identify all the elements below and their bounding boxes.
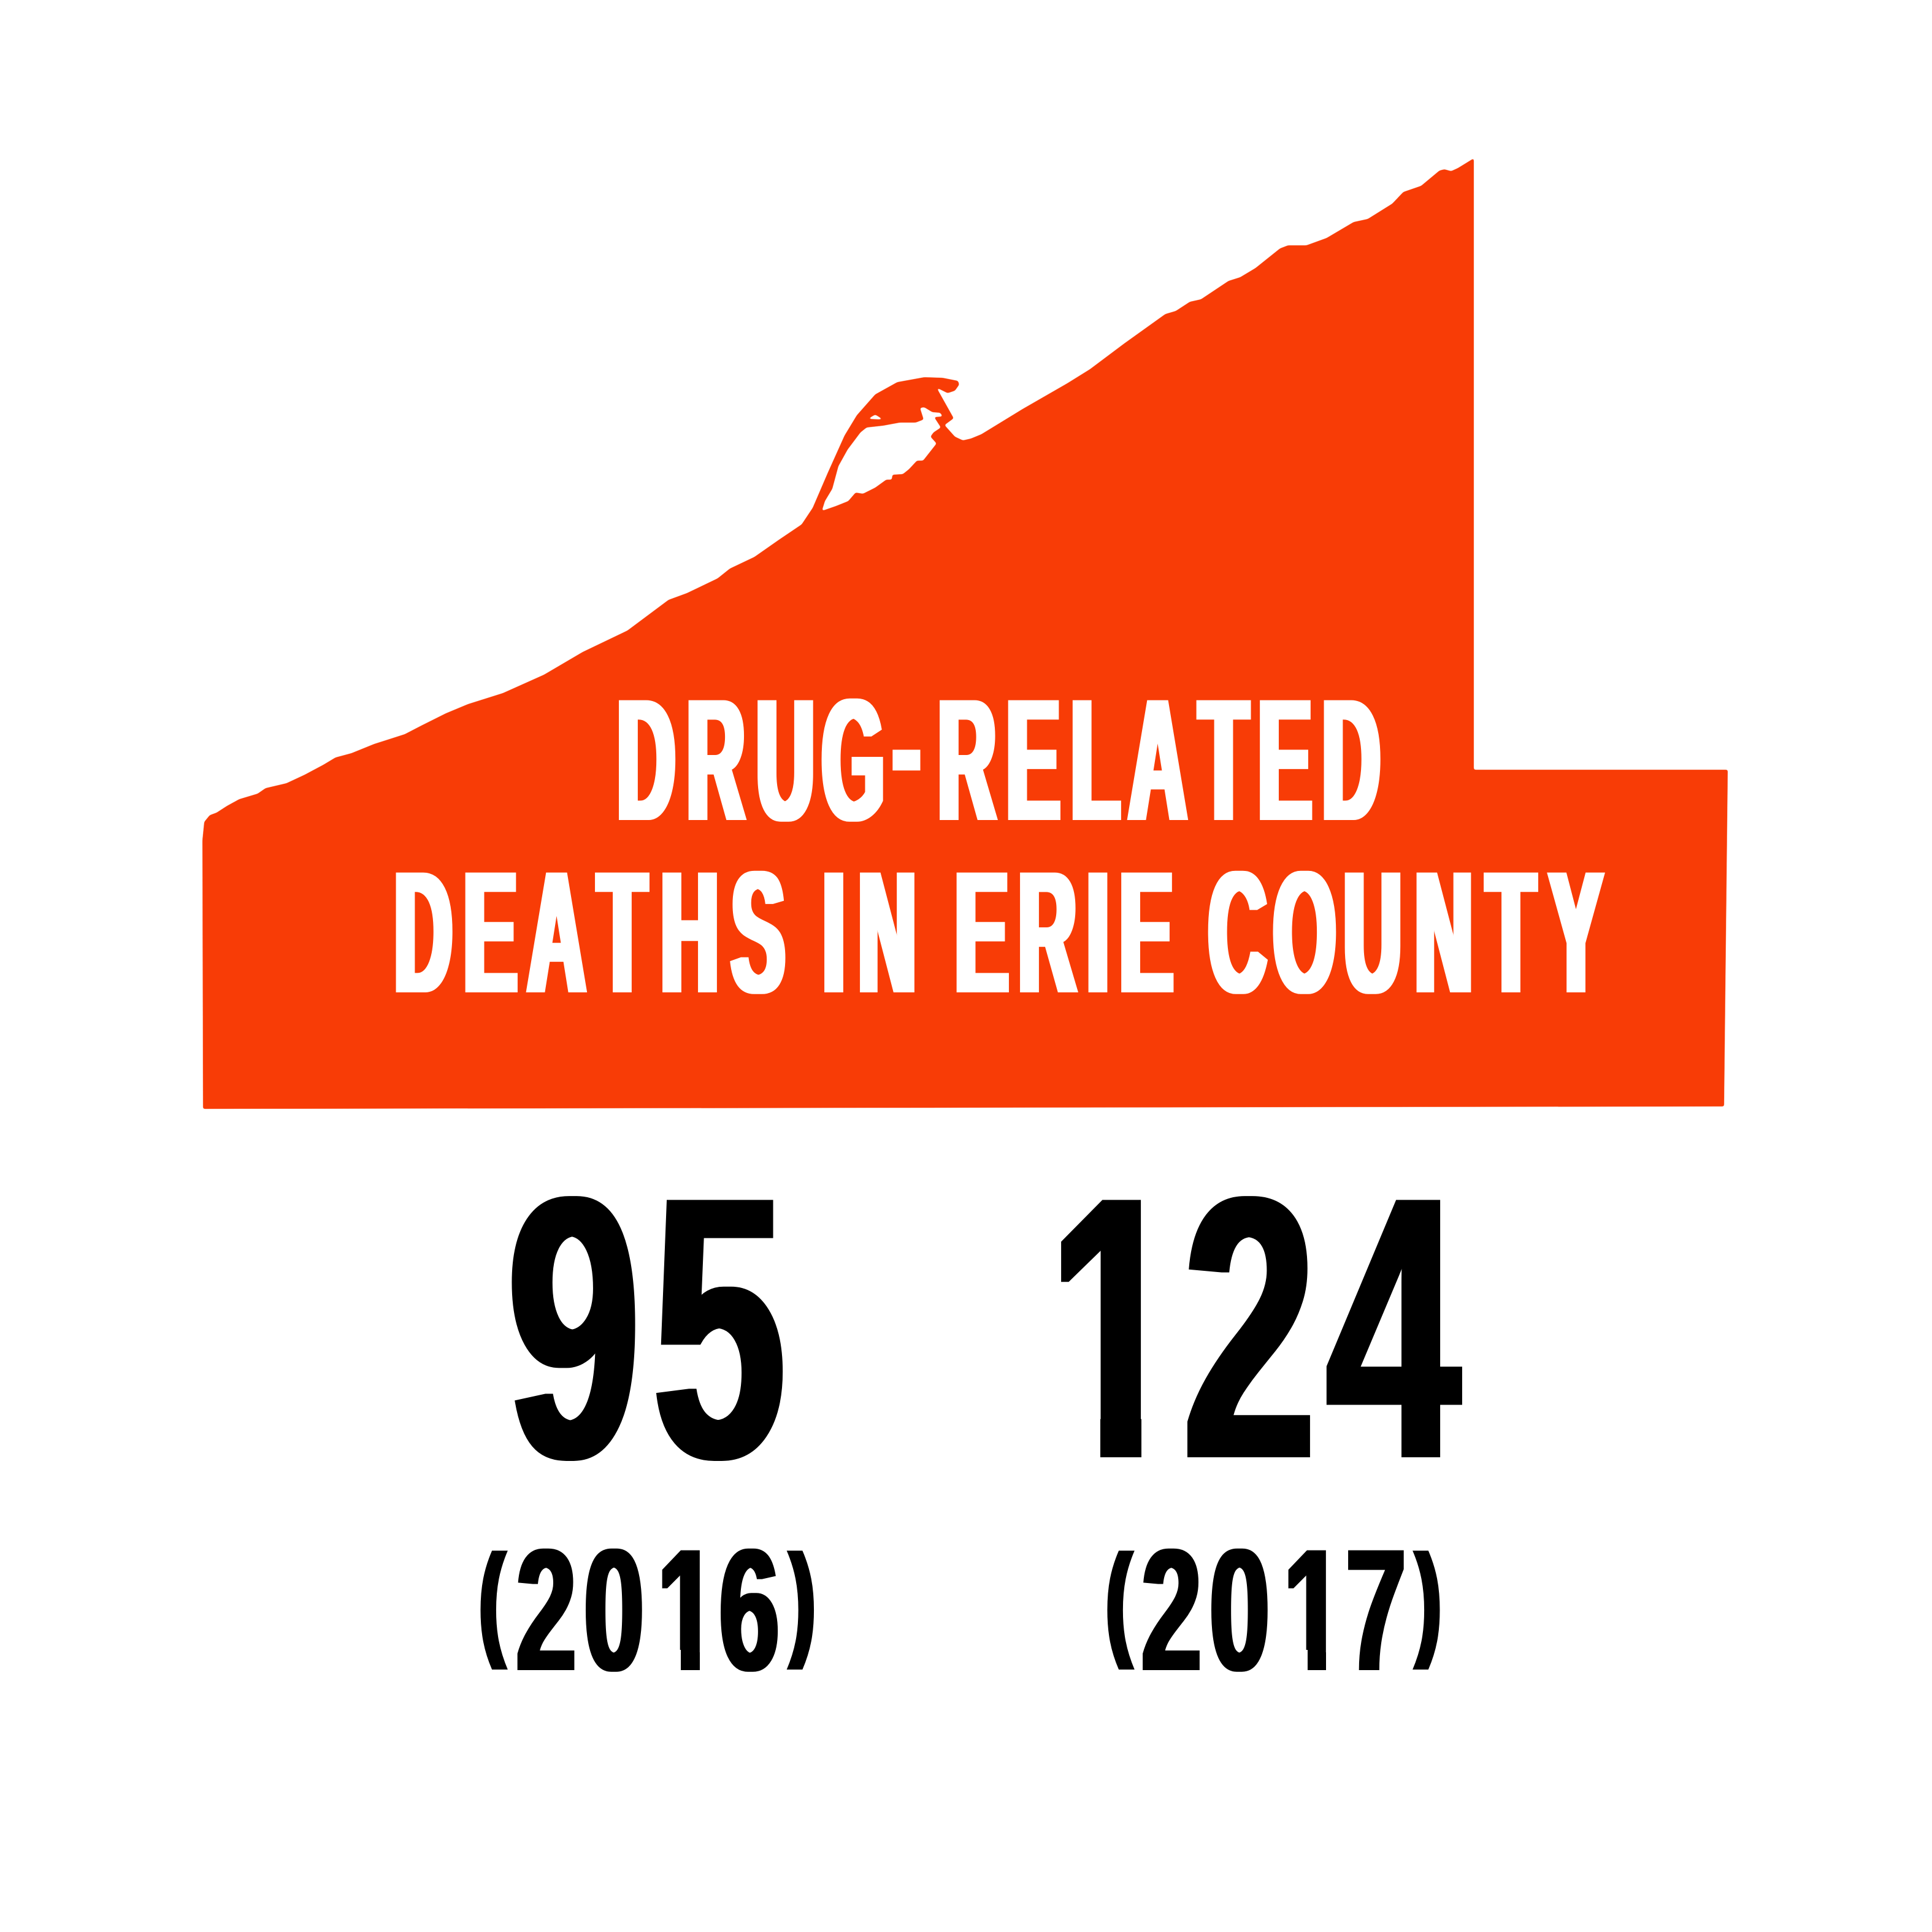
year label: 2017: ) [1415,1527,1441,1670]
stat: 124 deaths: 124 [1048,1118,1462,1537]
year label: 2017: 2017 [1141,1513,1406,1708]
title: line one: DRUG-RELATED [617,648,1380,857]
year label: 2016: 2016 [516,1513,779,1708]
year label: 2016: ( [479,1527,505,1670]
stat: 95 deaths: 95 [507,1118,786,1537]
icon: beaver cut-out [822,407,943,511]
panel: orange hillside with climbing beaver silhouette [202,158,1728,1109]
title: line two: DEATHS IN ERIE COUNTY [394,835,1603,1029]
year label: 2016: ) [789,1527,815,1670]
year label: 2017: ( [1106,1527,1132,1670]
